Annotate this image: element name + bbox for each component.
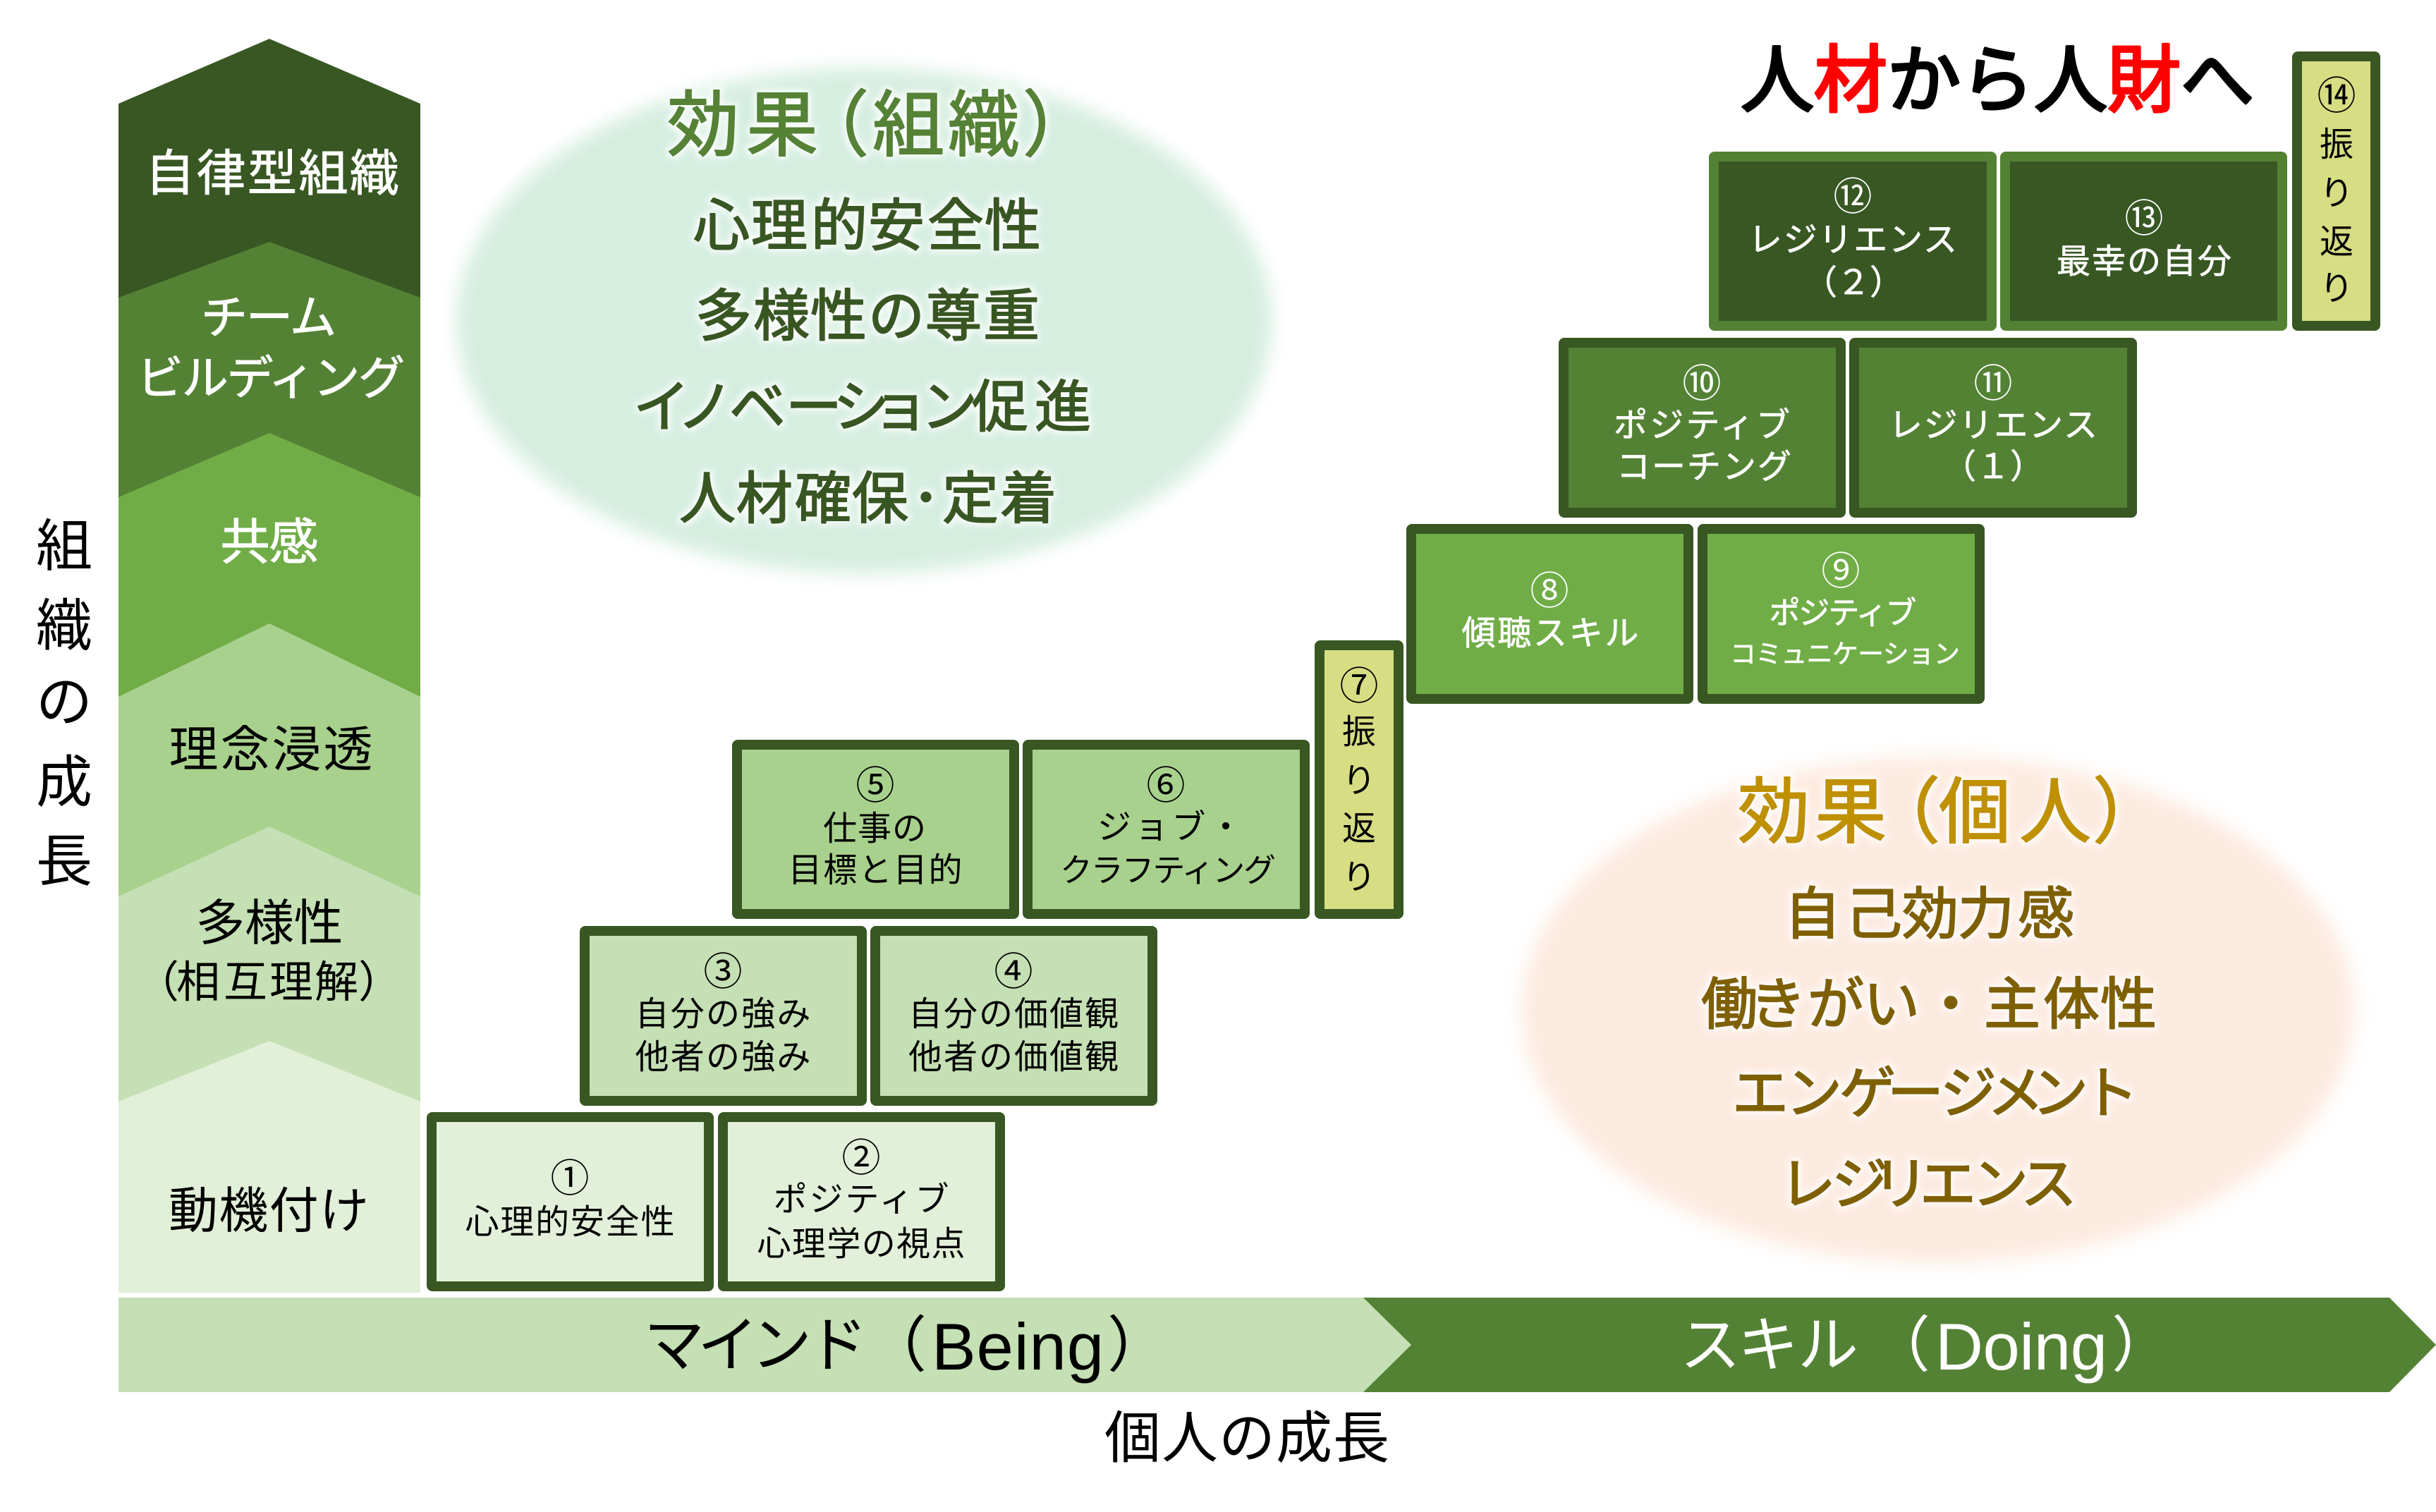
- box 12: レジリエンス（2）: [1709, 152, 1997, 331]
- arrow: スキル（Doing）: Doing: [1935, 1310, 2107, 1384]
- box 5: 仕事の目標と目的: [732, 740, 1019, 919]
- effects list: organisation: 人材確保･定着: [679, 468, 1056, 530]
- box 5: 仕事の目標と目的: 仕事の: [823, 810, 926, 848]
- level: 自律型組織: 自律型組織: [145, 146, 399, 201]
- box 11: レジリエンス（1）: [1849, 338, 2137, 518]
- arrow: スキル（Doing）: [1363, 1298, 2436, 1392]
- box 11: レジリエンス（1）: ⑪: [1973, 362, 2013, 406]
- level: 動機付け: [118, 1041, 420, 1293]
- box 14: 振り返り: り: [2320, 175, 2353, 212]
- axis label: 組織の成長: 成: [36, 751, 92, 814]
- box 2: ポジティブ心理学の視点: 心理学の視点: [757, 1226, 965, 1263]
- arrow: マインド（Being）: マインド（: [644, 1312, 927, 1379]
- panel: 効果（個人） ellipse: [1522, 757, 2354, 1262]
- box 3: 自分の強み 他者の強み: ③: [703, 950, 743, 994]
- level: 共感: 共感: [220, 515, 319, 570]
- box 7: 振り返り: り: [1342, 859, 1376, 896]
- box 6: ジョブ・クラフティング: ジョブ・: [1097, 809, 1243, 846]
- level: 多様性（相互理解）: （相互理解）: [135, 958, 402, 1007]
- arrow: マインド（Being）: ）: [1107, 1312, 1168, 1379]
- box 7: 振り返り: 返: [1342, 810, 1376, 848]
- box 1: 心理的安全性: [427, 1112, 714, 1291]
- effects list: individual: エンゲージメント: [1732, 1062, 2138, 1125]
- box 6: ジョブ・クラフティング: ⑥: [1146, 764, 1186, 807]
- box 2: ポジティブ心理学の視点: ②: [841, 1136, 881, 1180]
- arrow: マインド（Being）: [118, 1298, 1411, 1392]
- level: 動機付け: 動機付け: [169, 1183, 369, 1238]
- arrow: スキル（Doing）: スキル（: [1680, 1312, 1930, 1379]
- box 1: 心理的安全性: ①: [550, 1157, 590, 1200]
- heading: 効果（個人）: 効果（個人）: [1738, 772, 2164, 853]
- level: 自律型組織: [118, 39, 420, 303]
- box 5: 仕事の目標と目的: 目標と目的: [788, 852, 962, 889]
- box 8: 傾聴スキル: [1406, 524, 1693, 704]
- box 10: ポジティブコーチング: コーチング: [1616, 449, 1791, 486]
- box 4: 自分の価値観 他者の価値観: ④: [994, 950, 1033, 994]
- heading: 効果（組織）: 効果（組織）: [667, 85, 1095, 166]
- box 9: ポジティブコミュニケーション: コミュニケーション: [1730, 640, 1960, 669]
- effects list: organisation: イノベーション促進: [633, 376, 1091, 439]
- box 11: レジリエンス（1）: （１）: [1942, 449, 2044, 486]
- box 8: 傾聴スキル: ⑧: [1530, 569, 1569, 613]
- box 14: 振り返り: り: [2320, 270, 2353, 307]
- box 4: 自分の価値観 他者の価値観: [870, 926, 1157, 1106]
- box 6: ジョブ・クラフティング: [1023, 740, 1310, 919]
- box 7: 振り返り: [1315, 640, 1403, 919]
- level: 多様性（相互理解）: [118, 827, 420, 1107]
- axis label: 組織の成長: 長: [36, 830, 92, 893]
- box 14: 振り返り: [2292, 51, 2380, 331]
- box 7: 振り返り: り: [1342, 762, 1376, 800]
- box 12: レジリエンス（2）: ⑫: [1833, 175, 1872, 219]
- box 13: 最幸の自分: [2000, 152, 2287, 331]
- effects list: organisation: [633, 195, 1091, 530]
- level: 多様性（相互理解）: 多様性: [196, 896, 343, 951]
- box 13: 最幸の自分: ⑬: [2124, 197, 2164, 240]
- box 2: ポジティブ心理学の視点: ポジティブ: [773, 1181, 949, 1219]
- panel: organisational growth chevron column: [118, 39, 420, 1293]
- box 2: ポジティブ心理学の視点: [718, 1112, 1005, 1291]
- box 12: レジリエンス（2）: レジリエンス: [1748, 221, 1957, 259]
- box 14: 振り返り: 振: [2320, 126, 2353, 164]
- axis label: 個人の成長: 個人の成長: [1104, 1407, 1389, 1470]
- box 13: 最幸の自分: 最幸の自分: [2057, 243, 2231, 281]
- box 10: ポジティブコーチング: ⑩: [1682, 362, 1722, 406]
- box 6: ジョブ・クラフティング: クラフティング: [1060, 852, 1276, 889]
- level: チームビルディング: [118, 242, 420, 508]
- box 4: 自分の価値観 他者の価値観: 自分の価値観: [908, 996, 1119, 1033]
- box 14: 振り返り: 返: [2320, 224, 2353, 261]
- level: チームビルディング: ビルディング: [137, 352, 405, 404]
- box 8: 傾聴スキル: 傾聴スキル: [1461, 615, 1639, 652]
- box 5: 仕事の目標と目的: ⑤: [855, 764, 895, 807]
- effects list: individual: [1701, 883, 2157, 1216]
- box 3: 自分の強み 他者の強み: [580, 926, 867, 1106]
- box 10: ポジティブコーチング: ポジティブ: [1614, 407, 1790, 444]
- box 10: ポジティブコーチング: [1559, 338, 1846, 518]
- box 14: 振り返り: ⑭: [2317, 74, 2356, 118]
- effects list: individual: 働きがい・主体性: [1701, 973, 2157, 1036]
- box 9: ポジティブコミュニケーション: [1698, 524, 1985, 704]
- level: 共感: [118, 433, 420, 705]
- axis label: 組織の成長: [36, 515, 92, 893]
- box 4: 自分の価値観 他者の価値観: 他者の価値観: [908, 1039, 1119, 1076]
- box 11: レジリエンス（1）: レジリエンス: [1889, 407, 2097, 444]
- effects list: individual: レジリエンス: [1779, 1153, 2077, 1216]
- level: チームビルディング: チーム: [201, 291, 336, 343]
- arrow: マインド（Being）: Being: [932, 1310, 1104, 1384]
- axis label: 組織の成長: 織: [36, 595, 92, 657]
- panel: 効果（組織） ellipse: [456, 68, 1272, 573]
- axis label: 組織の成長: 組: [36, 515, 92, 578]
- level: 理念浸透: [118, 623, 420, 903]
- level: 理念浸透: 理念浸透: [169, 722, 372, 777]
- box 9: ポジティブコミュニケーション: ポジティブ: [1769, 596, 1917, 630]
- box 3: 自分の強み 他者の強み: 自分の強み: [635, 996, 811, 1033]
- axis label: 組織の成長: の: [36, 671, 92, 733]
- title: 人材から人財へ: 人材から人財へ: [1741, 40, 2254, 122]
- box 3: 自分の強み 他者の強み: 他者の強み: [635, 1039, 811, 1076]
- effects list: individual: 自己効力感: [1784, 883, 2074, 946]
- box 7: 振り返り: ⑦: [1339, 664, 1379, 708]
- effects list: organisation: 多様性の尊重: [695, 285, 1040, 348]
- box 7: 振り返り: 振: [1342, 714, 1376, 751]
- box 12: レジリエンス（2）: （２）: [1803, 264, 1904, 302]
- box 1: 心理的安全性: 心理的安全性: [465, 1204, 674, 1241]
- arrow: スキル（Doing）: ）: [2112, 1312, 2172, 1379]
- effects list: organisation: 心理的安全性: [693, 195, 1041, 257]
- box 9: ポジティブコミュニケーション: ⑨: [1821, 549, 1861, 593]
